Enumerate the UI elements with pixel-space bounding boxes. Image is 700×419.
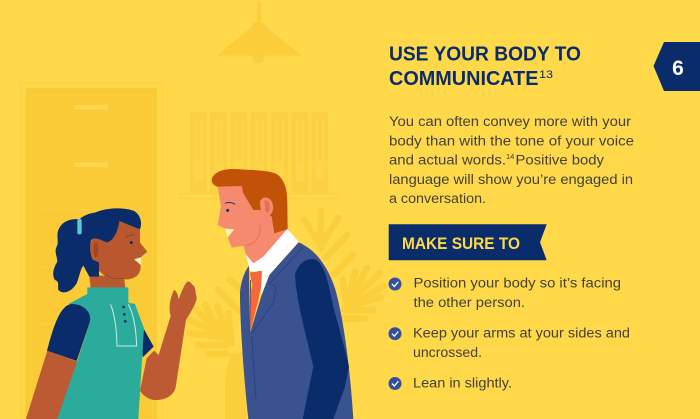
door [20, 82, 163, 419]
woman's hair [53, 208, 141, 292]
woman's head [92, 220, 147, 279]
banner: make sure to: MAKE SURE TO [402, 234, 520, 253]
checklist item 2 [388, 326, 630, 360]
title [389, 42, 581, 90]
checklist item 2: Keep your arms at your sides and [413, 326, 630, 341]
number badge: 6 [672, 57, 684, 80]
icon: ceiling lamp [217, 2, 302, 63]
woman's hair clip [77, 219, 82, 234]
man's hair [212, 169, 288, 233]
checklist item 1 [388, 276, 621, 310]
man's ear [260, 197, 273, 217]
intro paragraph: Positive body [516, 153, 604, 168]
title: COMMUNICATE [389, 67, 538, 90]
checklist item 1: the other person. [414, 295, 525, 310]
woman's ear [89, 238, 100, 262]
checklist item 3: Lean in slightly. [413, 376, 512, 391]
vest placket [111, 304, 137, 346]
intro paragraph: You can often convey more with your [389, 114, 632, 129]
figure: woman [26, 208, 197, 419]
intro paragraph: body than with the tone of your voice [389, 133, 634, 148]
title: USE YOUR BODY TO [389, 42, 581, 66]
woman's neck [89, 275, 125, 288]
intro paragraph: a conversation. [389, 191, 486, 206]
woman's near arm [26, 351, 77, 419]
potted plant [190, 212, 383, 419]
man's white shirt collar [246, 229, 299, 295]
woman's far sleeve [142, 325, 154, 357]
jacket lapel lines [250, 247, 303, 399]
title: 13 [539, 69, 553, 81]
man's face [218, 185, 262, 248]
intro paragraph [389, 114, 634, 206]
woman's raised arm and hand [140, 282, 197, 400]
number badge [654, 42, 700, 91]
woman's teal vest [57, 287, 144, 419]
woman's navy sleeve [47, 304, 90, 361]
man's tie [250, 271, 262, 333]
checklist item 2: uncrossed. [413, 345, 482, 360]
intro paragraph: 14 [506, 152, 514, 161]
man's neck [242, 210, 292, 273]
bookshelf [180, 112, 338, 199]
intro paragraph: language will show you’re engaged in [389, 172, 633, 187]
checklist item 1: Position your body so it’s facing [414, 276, 621, 291]
intro paragraph: and actual words. [389, 153, 506, 168]
figure: man [212, 169, 353, 419]
man's navy sleeve [295, 259, 349, 419]
man's jacket [240, 242, 353, 419]
banner: make sure to [389, 224, 547, 260]
